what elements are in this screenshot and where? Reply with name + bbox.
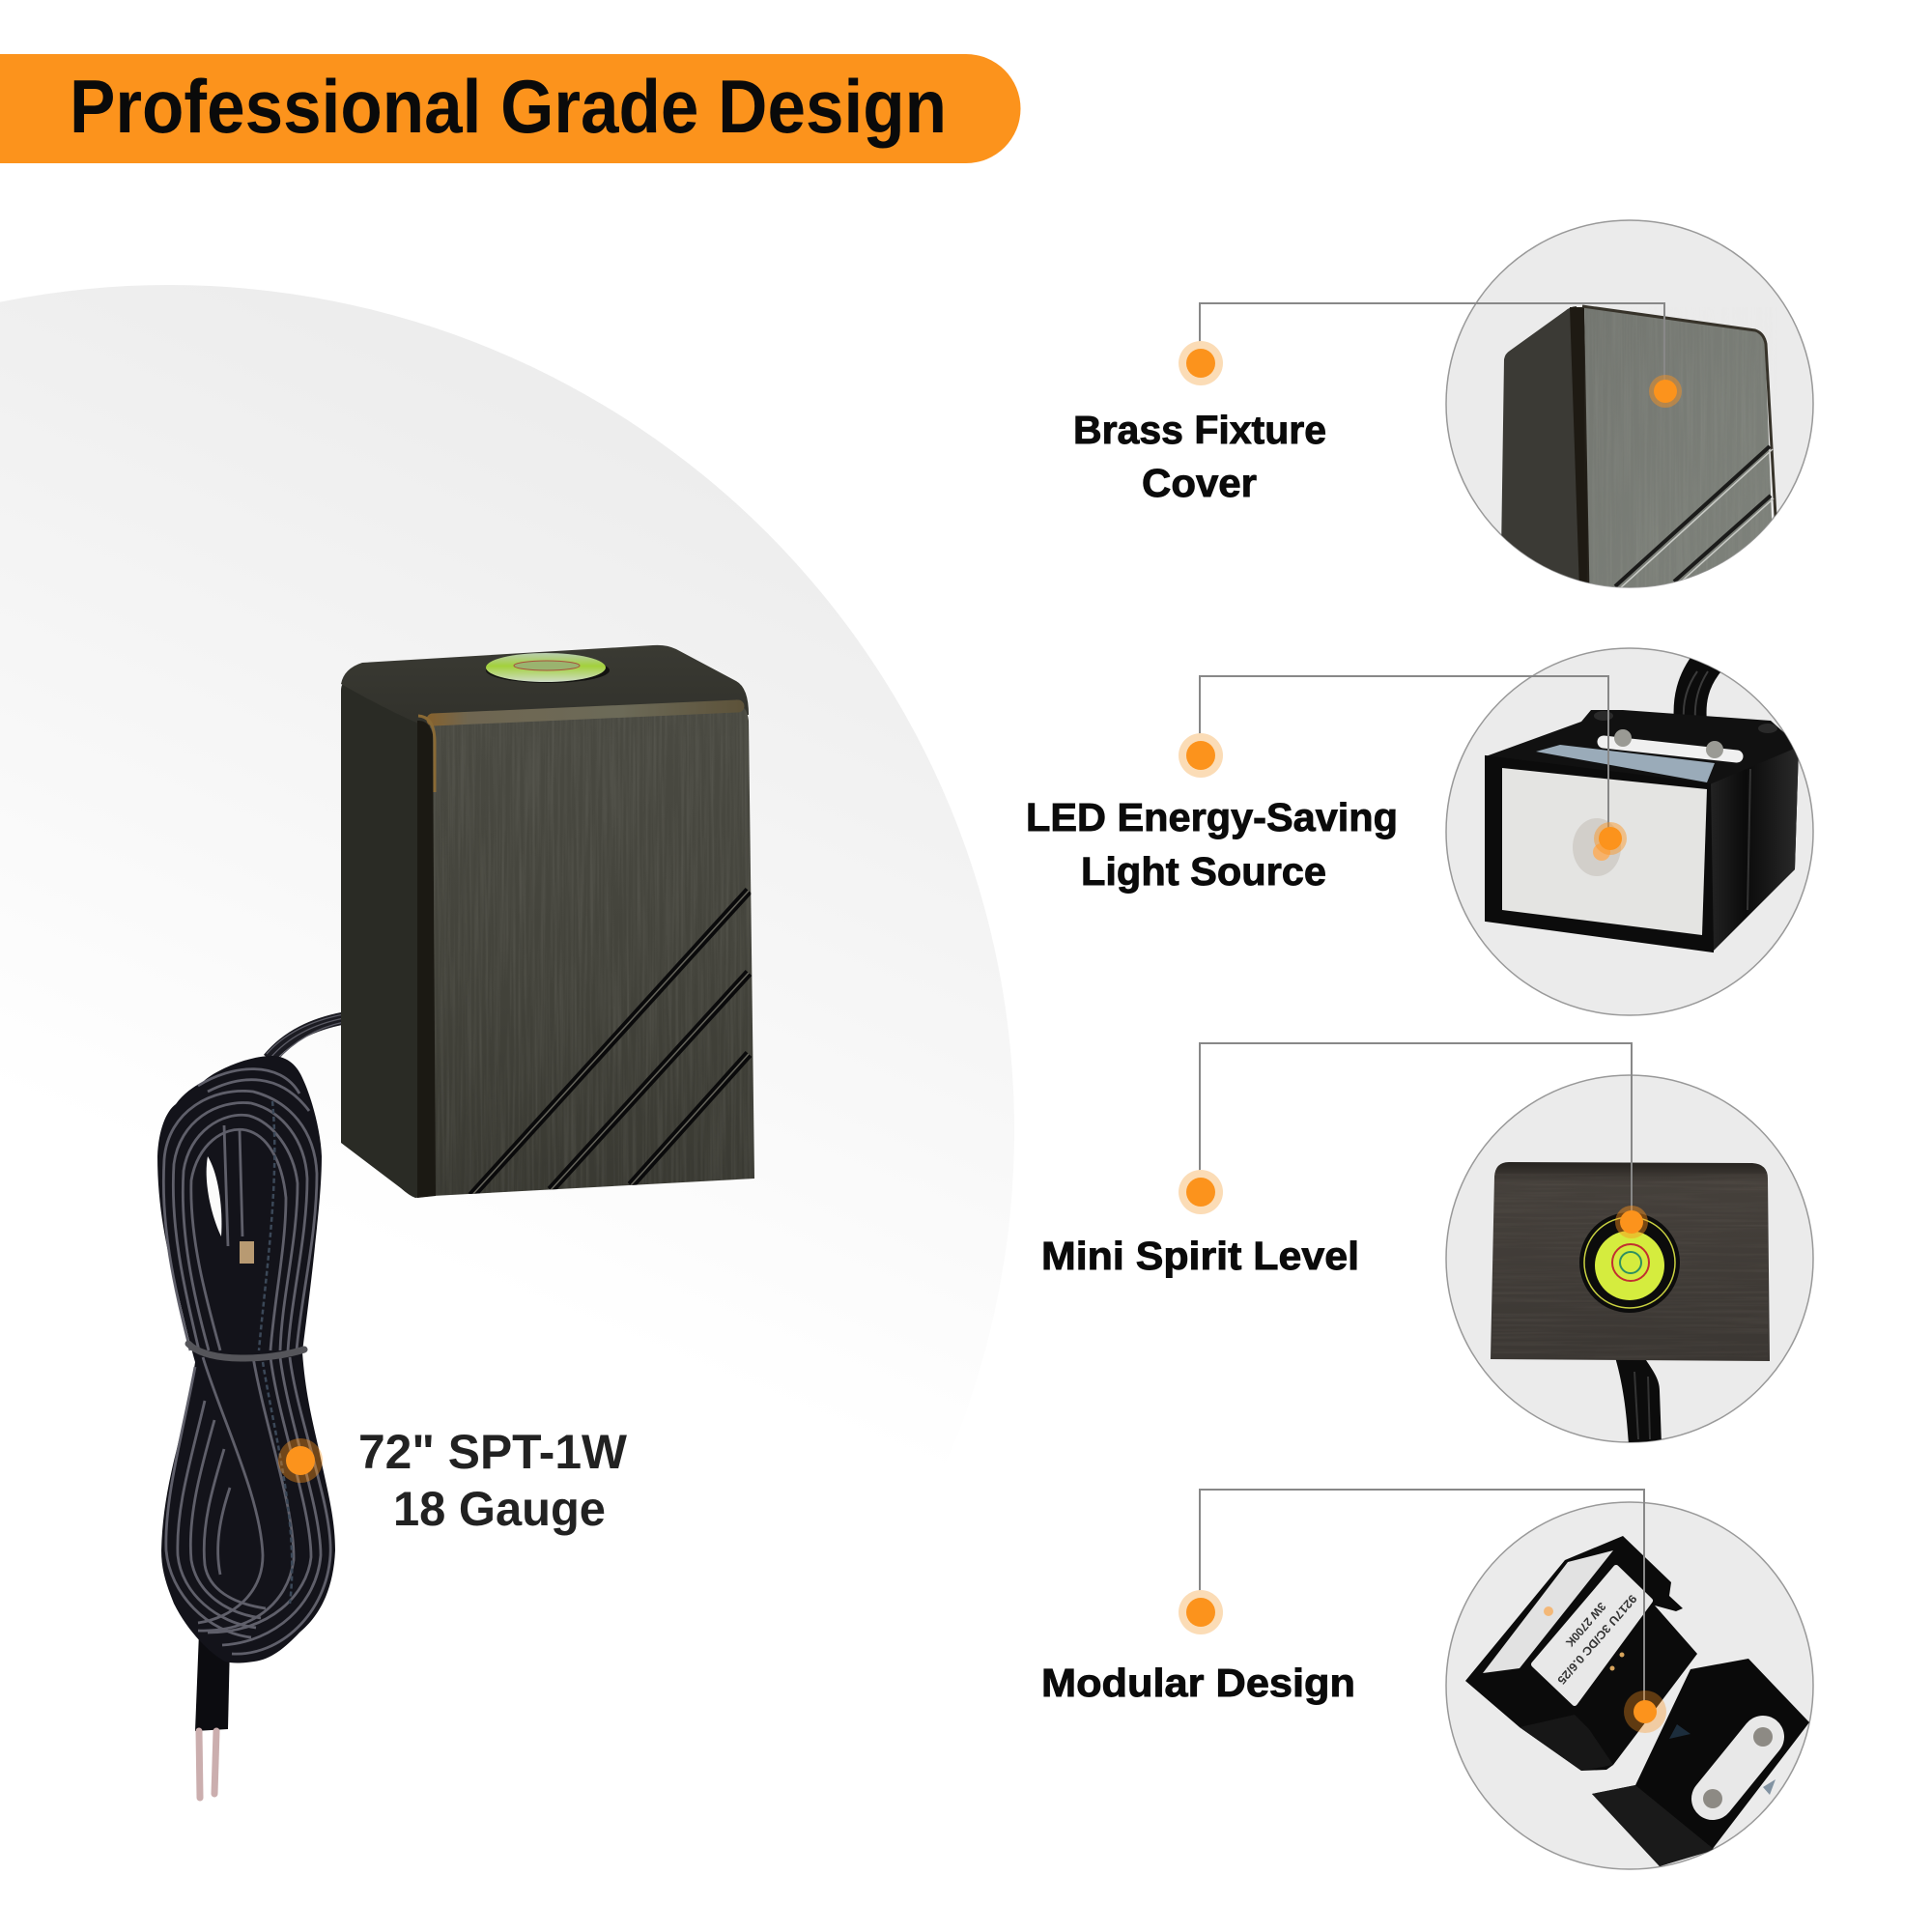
label: Brass Fixture [1073,408,1326,452]
callout: cord [278,1425,628,1536]
diagonal grooves [471,891,749,1196]
label: Cover [1142,461,1257,505]
connector [1200,303,1664,391]
dot: left [1179,1170,1223,1214]
title text: Professional Grade Design [70,64,947,149]
dot: on part [1649,375,1682,408]
connector [1200,1490,1644,1712]
detail circle [1446,648,1813,1015]
dot: left [1179,733,1223,778]
detail circle [1446,1075,1813,1444]
panel: modular design [1041,1490,1813,1869]
bare wire ends [199,1731,216,1798]
dot: on part [1624,1690,1666,1733]
dark front corner strip [417,721,436,1198]
label: Light Source [1081,849,1326,894]
lead wire from the fixture [269,1018,344,1059]
dot: left [1179,341,1223,385]
connector [1200,1043,1632,1222]
title banner [0,54,1020,163]
printed cord marking [259,1101,292,1604]
dot: on part [1615,1206,1648,1238]
cord tail [195,1633,230,1731]
dot: on part [1594,822,1627,855]
small wire tag [240,1241,254,1264]
rubber band [188,1344,304,1358]
dot: left [1179,1590,1223,1634]
front face [430,705,754,1196]
label [1073,408,1326,505]
product: cord coil [157,1014,344,1798]
panel: brass fixture cover [1073,220,1813,618]
background: soft grey circle [0,285,1014,1932]
bronze highlight band [433,706,738,720]
label: Mini Spirit Level [1041,1234,1359,1278]
detail circle: 3W 2700K [1563,1600,1608,1650]
bronze corner glint [418,716,435,792]
gap in the coil [207,1156,221,1236]
callout: cord: 18 Gauge [393,1482,606,1536]
top face [341,645,749,726]
coil strands [163,1069,330,1654]
left face [341,682,433,1198]
cord label: 72" SPT-1W [358,1425,628,1479]
panel: mini spirit level [1041,1043,1813,1444]
connector [1200,676,1608,838]
label: Modular Design [1041,1661,1355,1705]
cord dot [278,1438,323,1483]
detail circle [1446,1502,1813,1869]
spirit level bubble [486,658,610,683]
panel: LED light source [1026,648,1813,1015]
detail circle [1446,220,1813,618]
coil silhouette [157,1056,335,1663]
detail circle: 9217U 3C/DC 0.6/25 [1554,1592,1639,1688]
product: brass fixture [341,645,758,1198]
label [1026,795,1398,894]
label: LED Energy-Saving [1026,795,1398,839]
